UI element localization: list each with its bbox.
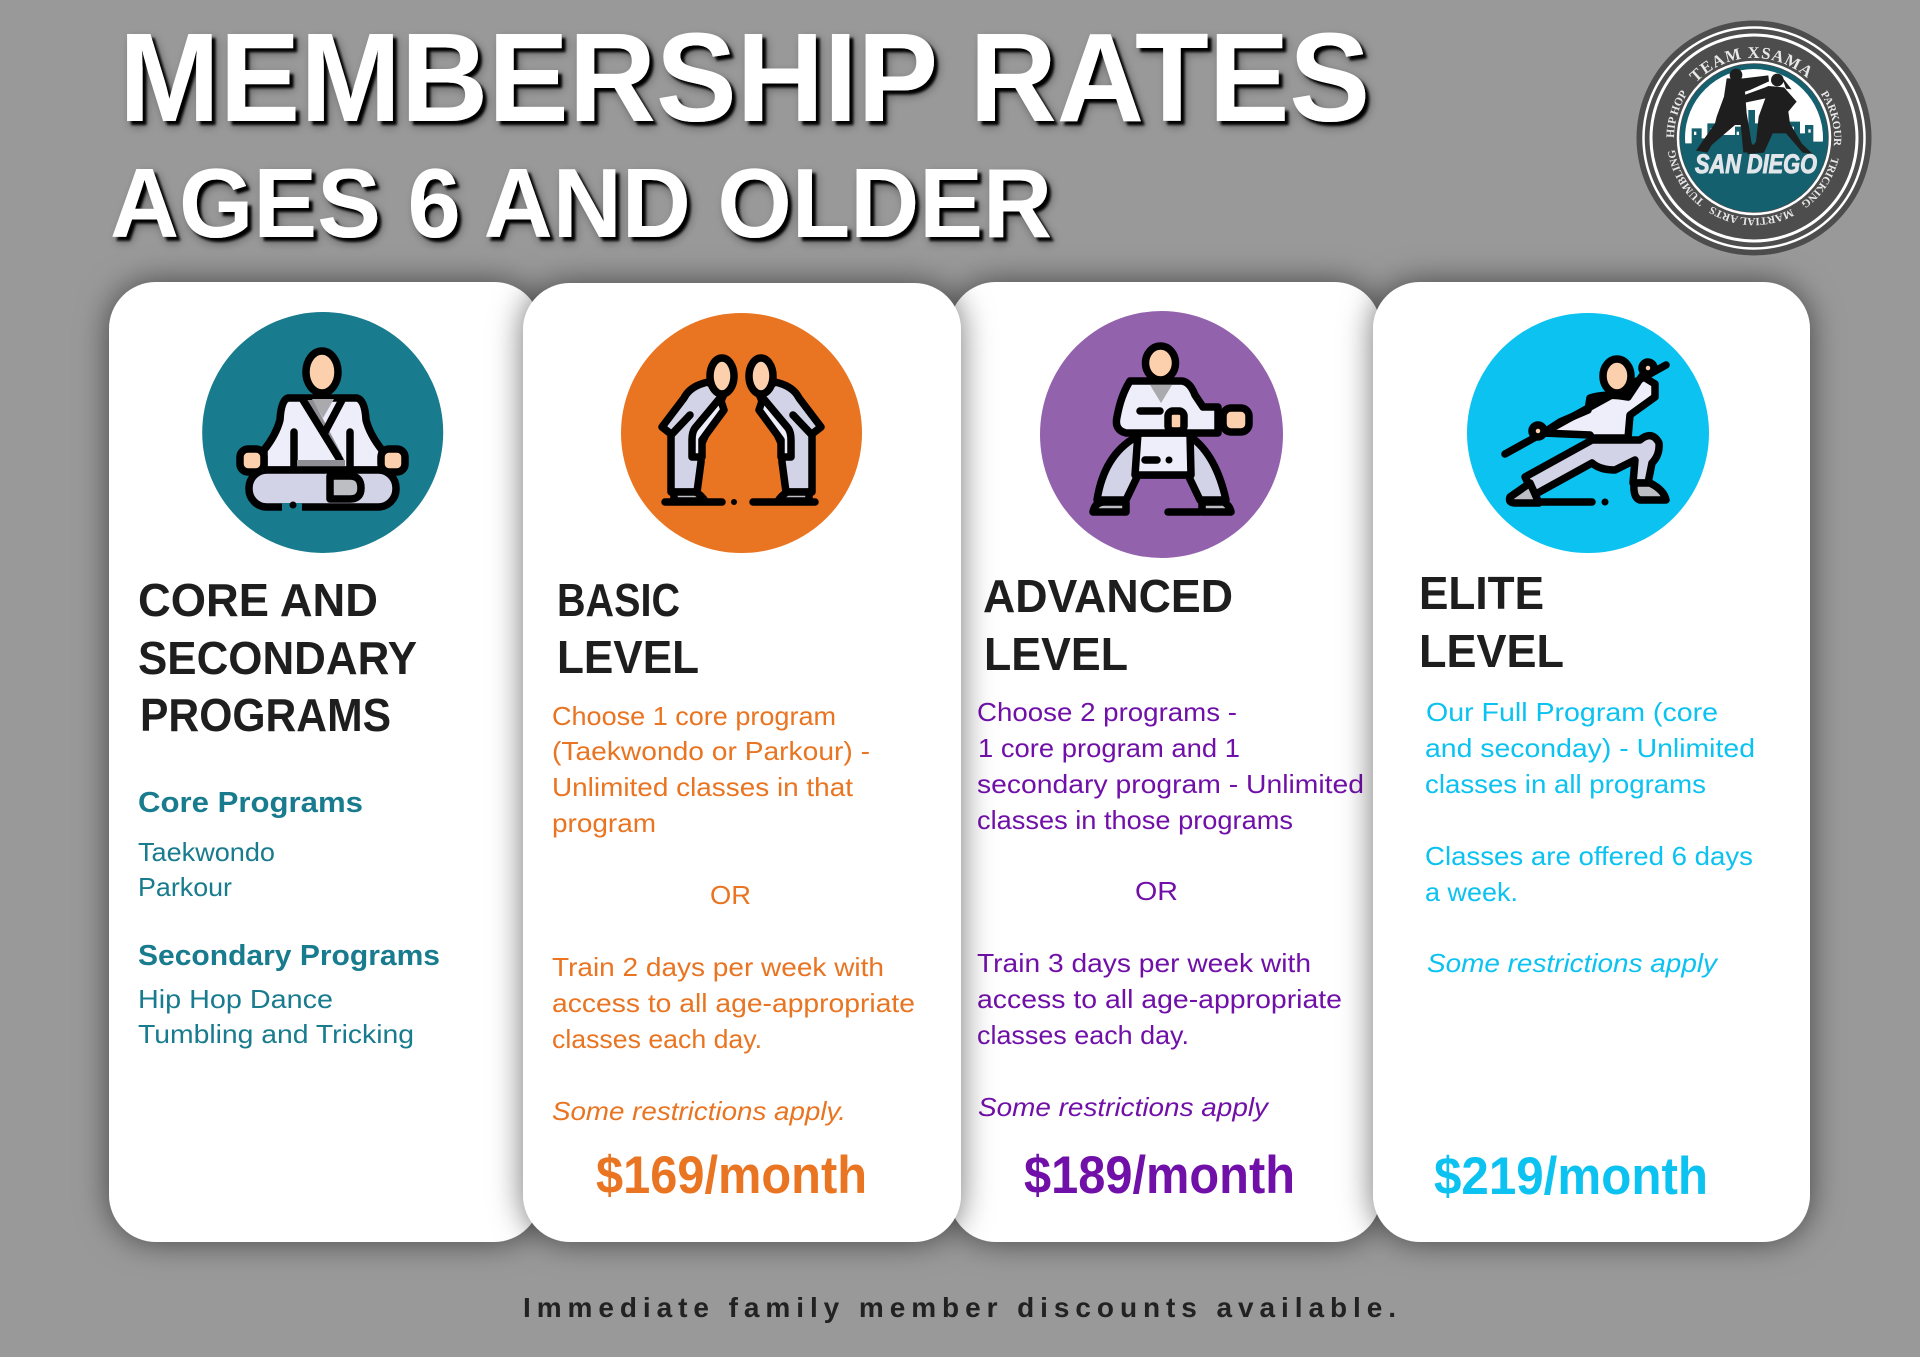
panel: elite level bbox=[1373, 282, 1810, 1242]
text: core programs list: Parkour bbox=[138, 872, 232, 902]
logo: Team Xsama San Diego: TRICKING bbox=[1802, 158, 1839, 208]
text: basic description: Choose 1 core program bbox=[552, 701, 836, 731]
logo: Team Xsama San Diego: SAN DIEGO bbox=[1695, 149, 1817, 179]
text: advanced description: secondary program - Unlimited bbox=[977, 769, 1364, 799]
text: elite description: and seconday) - Unlimited bbox=[1425, 733, 1755, 763]
heading: elite level: ELITE bbox=[1419, 567, 1544, 619]
icon: martial artist with staff bbox=[1467, 313, 1709, 553]
heading: core and secondary programs bbox=[138, 574, 417, 741]
text: secondary programs list bbox=[138, 940, 440, 1049]
icon: meditating martial artist bbox=[202, 312, 443, 553]
text: basic description: Train 2 days per week with bbox=[552, 952, 884, 982]
logo: Team Xsama San Diego: HIP HOP bbox=[1666, 90, 1686, 138]
text: secondary programs list: Tumbling and Tricking bbox=[138, 1019, 414, 1049]
subtitle: AGES 6 AND OLDER bbox=[110, 148, 1052, 258]
text: basic description: Some restrictions apply. bbox=[552, 1096, 846, 1126]
title: MEMBERSHIP RATES bbox=[119, 7, 1370, 148]
heading: elite level: LEVEL bbox=[1419, 625, 1564, 677]
text: elite description bbox=[1425, 697, 1755, 978]
text: basic description: classes each day. bbox=[552, 1024, 762, 1054]
footer note: Immediate family member discounts available. bbox=[523, 1292, 1396, 1323]
text: elite description: a week. bbox=[1425, 877, 1518, 907]
heading: core and secondary programs: PROGRAMS bbox=[140, 689, 391, 741]
text: elite description: Classes are offered 6 days bbox=[1425, 841, 1753, 871]
text: advanced description: Train 3 days per week with bbox=[977, 948, 1311, 978]
logo: Team Xsama San Diego: TEAM XSAMA bbox=[1688, 47, 1810, 82]
text: advanced description: Choose 2 programs - bbox=[977, 697, 1237, 727]
logo: Team Xsama San Diego: TUMBLING bbox=[1668, 150, 1704, 206]
text: core programs list: Core Programs bbox=[138, 787, 363, 819]
price: basic: $169/month bbox=[596, 1146, 867, 1205]
text: advanced description: access to all age-appropriate bbox=[977, 984, 1342, 1014]
panel: advanced level bbox=[949, 282, 1381, 1242]
text: basic description: OR bbox=[710, 880, 751, 910]
text: basic description: access to all age-appropriate bbox=[552, 988, 915, 1018]
text: advanced description bbox=[977, 697, 1364, 1122]
text: core programs list: Taekwondo bbox=[138, 837, 275, 867]
text: basic description: program bbox=[552, 808, 656, 838]
text: advanced description: OR bbox=[1135, 876, 1178, 906]
text: secondary programs list: Secondary Programs bbox=[138, 940, 440, 972]
price: elite: $219/month bbox=[1434, 1147, 1708, 1206]
text: advanced description: classes in those programs bbox=[977, 805, 1293, 835]
logo: Team Xsama San Diego: MARTIAL ARTS bbox=[1709, 206, 1794, 226]
heading: basic level bbox=[557, 574, 699, 683]
logo: Team Xsama San Diego: PARKOUR bbox=[1820, 90, 1842, 146]
text: basic description bbox=[552, 701, 915, 1126]
text: advanced description: classes each day. bbox=[977, 1020, 1189, 1050]
price: advanced: $189/month bbox=[1024, 1146, 1295, 1205]
heading: elite level bbox=[1419, 567, 1564, 677]
logo: Team Xsama San Diego bbox=[1636, 20, 1872, 256]
icon: two martial artists bowing bbox=[621, 313, 862, 553]
heading: advanced level: ADVANCED bbox=[983, 570, 1233, 622]
text: secondary programs list: Hip Hop Dance bbox=[138, 984, 333, 1014]
text: advanced description: 1 core program and 1 bbox=[978, 733, 1240, 763]
heading: advanced level: LEVEL bbox=[984, 628, 1128, 680]
panel: core and secondary programs bbox=[109, 282, 541, 1242]
heading: advanced level bbox=[983, 570, 1233, 680]
heading: basic level: BASIC bbox=[557, 574, 680, 626]
text: advanced description: Some restrictions apply bbox=[978, 1092, 1270, 1122]
text: elite description: Our Full Program (core bbox=[1426, 697, 1718, 727]
heading: basic level: LEVEL bbox=[557, 631, 699, 683]
heading: core and secondary programs: SECONDARY bbox=[138, 632, 417, 684]
text: elite description: Some restrictions apply bbox=[1427, 948, 1719, 978]
heading: core and secondary programs: CORE AND bbox=[138, 574, 378, 626]
icon: karate stance bbox=[1040, 311, 1283, 558]
panel: basic level bbox=[523, 283, 961, 1242]
text: elite description: classes in all programs bbox=[1425, 769, 1706, 799]
text: basic description: Unlimited classes in that bbox=[552, 772, 854, 802]
text: basic description: (Taekwondo or Parkour) - bbox=[552, 736, 870, 766]
text: core programs list bbox=[138, 787, 363, 902]
